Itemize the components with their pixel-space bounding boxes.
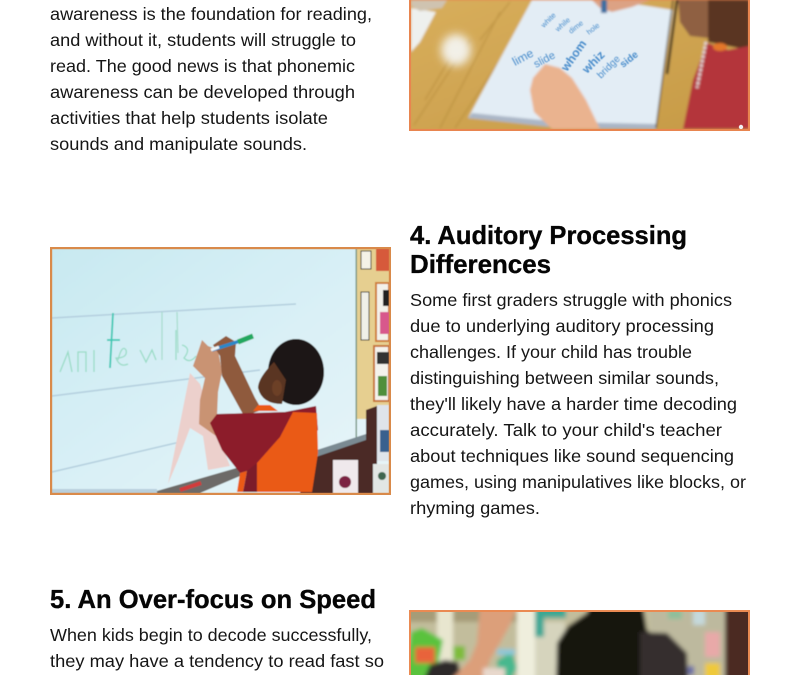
photo: child writing words on a small whiteboard: lime xyxy=(510,46,536,69)
photo: boy writing on an interactive whiteboard xyxy=(50,247,391,495)
text block: auditory processing paragraph: rhyming games. xyxy=(410,498,540,518)
photo: child writing words on a small whiteboard: hole xyxy=(585,21,601,37)
text block: phonemic awareness paragraph: sounds and manipulate sounds. xyxy=(50,134,307,154)
photo: child writing words on a small whiteboard: whom xyxy=(557,37,589,75)
heading: 5. An Over-focus on Speed: 5. An Over-focus on Speed xyxy=(50,584,376,614)
photo: child writing words on a small whiteboard: dime xyxy=(567,18,585,36)
photo: child writing words on a small whiteboard: bridge xyxy=(595,53,623,81)
text block: phonemic awareness paragraph: awareness can be developed through xyxy=(50,82,355,102)
photo: child writing words on a small whiteboard: while xyxy=(553,15,572,34)
text block: auditory processing paragraph: Some first graders struggle with phonics xyxy=(410,290,732,310)
text block: phonemic awareness paragraph: activities that help students isolate xyxy=(50,108,328,128)
text block: auditory processing paragraph: games, using manipulatives like blocks, or xyxy=(410,472,746,492)
photo: child writing words on a small whiteboard: whiz xyxy=(579,48,608,77)
photo: child writing words on a small whiteboard: side xyxy=(618,49,641,70)
text block: over-focus on speed paragraph: When kids begin to decode successfully, xyxy=(50,625,372,645)
text block: over-focus on speed paragraph: they may have a tendency to read fast so xyxy=(50,651,384,671)
text block: auditory processing paragraph: accurately. Talk to your child's teacher xyxy=(410,420,722,440)
photo: child writing words on a small whiteboard: slide xyxy=(532,49,557,71)
text block: auditory processing paragraph: due to underlying auditory processing xyxy=(410,316,714,336)
text block: phonemic awareness paragraph: awareness is the foundation for reading, xyxy=(50,4,372,24)
text block: phonemic awareness paragraph: and without it, students will struggle to xyxy=(50,30,356,50)
text block: phonemic awareness paragraph xyxy=(50,4,372,154)
photo: child writing words on a small whiteboard: white xyxy=(538,11,558,30)
text block: phonemic awareness paragraph: read. The good news is that phonemic xyxy=(50,56,355,76)
text block: auditory processing paragraph: they'll likely have a harder time decoding xyxy=(410,394,737,414)
photo: children raising hands in a classroom xyxy=(405,606,755,675)
text block: over-focus on speed paragraph xyxy=(50,625,384,671)
heading: 4. Auditory Processing Differences: Differences xyxy=(410,249,551,279)
heading: 4. Auditory Processing Differences: 4. Auditory Processing xyxy=(410,220,687,250)
text block: auditory processing paragraph: distinguishing between similar sounds, xyxy=(410,368,719,388)
text block: auditory processing paragraph xyxy=(410,290,746,518)
photo: child writing words on a small whiteboard xyxy=(409,0,750,131)
text block: auditory processing paragraph: about techniques like sound sequencing xyxy=(410,446,734,466)
text block: auditory processing paragraph: challenges. If your child has trouble xyxy=(410,342,692,362)
heading: 4. Auditory Processing Differences xyxy=(410,220,687,279)
